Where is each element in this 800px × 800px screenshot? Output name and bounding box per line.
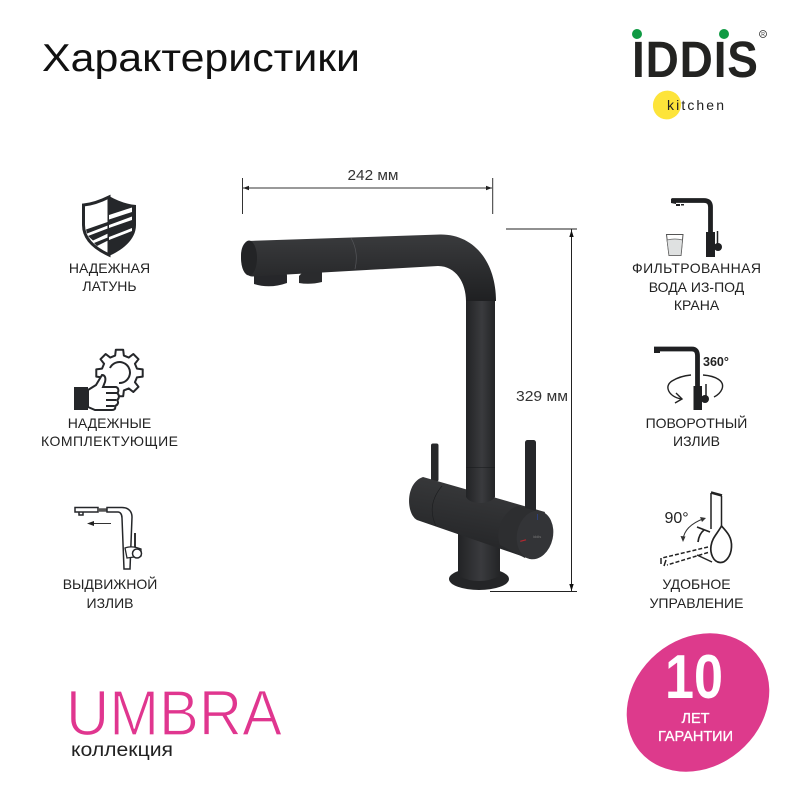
feature: easy control: УПРАВЛЕНИЕ <box>650 595 743 611</box>
warranty badge: 10 <box>665 643 723 712</box>
feature: swivel spout: ИЗЛИВ <box>673 433 720 449</box>
dimension: width 242 mm <box>242 167 493 214</box>
feature: swivel spout <box>646 348 747 449</box>
feature: reliable components <box>41 350 178 449</box>
faucet spout bottom nozzles <box>254 264 322 286</box>
faucet left lever <box>431 444 438 482</box>
label: НАДЕЖНАЯ <box>69 260 150 276</box>
icon: pull-out faucet <box>75 508 142 569</box>
faucet spout <box>241 234 496 301</box>
logo: IDDIS kitchen: R <box>761 32 765 38</box>
faucet illustration <box>241 234 558 590</box>
dimension: width 242 mm: 242 мм <box>348 167 398 184</box>
icon: shield <box>84 196 136 256</box>
feature: pull-out spout: ИЗЛИВ <box>87 595 133 611</box>
faucet right lever <box>525 440 536 514</box>
feature: filtered water <box>632 198 761 313</box>
feature: pull-out spout <box>63 508 157 611</box>
feature: filtered water: ВОДА ИЗ-ПОД <box>649 279 745 295</box>
faucet body <box>409 477 545 559</box>
faucet front cap <box>498 506 558 563</box>
feature: reliable brass: ЛАТУНЬ <box>82 278 137 294</box>
feature: filtered water: КРАНА <box>674 297 720 313</box>
feature: reliable brass <box>69 196 150 294</box>
label: ФИЛЬТРОВАННАЯ <box>632 260 761 276</box>
feature: reliable components: КОМПЛЕКТУЮЩИЕ <box>41 433 178 449</box>
label: УДОБНОЕ <box>662 576 731 592</box>
logo: IDDIS kitchen: IDDIS <box>632 32 758 89</box>
collection name: UMBRA <box>66 677 282 749</box>
warranty badge: ГАРАНТИИ <box>658 729 733 745</box>
icon: faucet with glass <box>666 198 722 257</box>
dimension: height 329 mm <box>490 229 577 592</box>
logo: IDDIS kitchen <box>632 29 766 124</box>
icon: rotating faucet: 360° <box>703 355 729 369</box>
dimension: height 329 mm: 329 мм <box>516 388 568 405</box>
label: ПОВОРОТНЫЙ <box>646 414 747 431</box>
title: Характеристики <box>42 37 360 80</box>
warranty badge: ЛЕТ <box>681 711 710 727</box>
collection name: коллекция <box>71 740 173 761</box>
icon: gear and thumb up <box>74 350 143 410</box>
logo: IDDIS kitchen: kitchen <box>667 97 724 113</box>
label: НАДЕЖНЫЕ <box>68 415 151 431</box>
label: ВЫДВИЖНОЙ <box>63 575 157 592</box>
icon: 90 degree lever: 90° <box>664 510 689 527</box>
warranty badge <box>599 605 797 800</box>
faucet front cap: iddis <box>533 534 541 539</box>
feature: easy control <box>650 492 743 611</box>
faucet pedestal and base <box>449 530 509 590</box>
faucet column <box>466 300 495 497</box>
